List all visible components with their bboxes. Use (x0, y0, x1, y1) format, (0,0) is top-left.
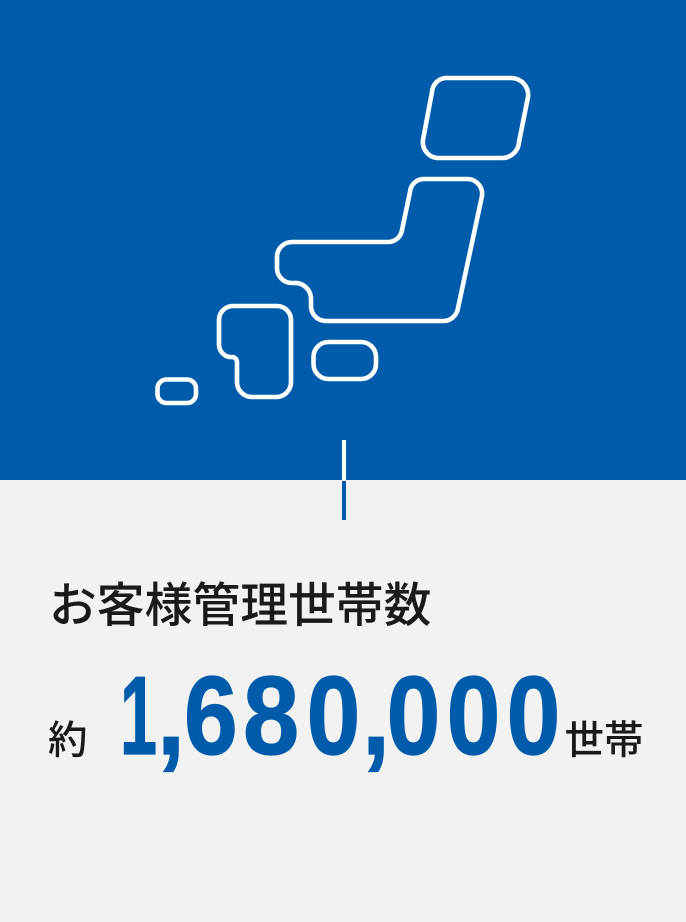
map of Japan (158, 78, 528, 403)
island: Shikoku (314, 342, 376, 379)
main number: , (157, 653, 185, 778)
main number: 0 (507, 655, 560, 779)
main number: 0 (387, 655, 440, 779)
main number: 1 (120, 655, 157, 778)
prefix label: 約 (48, 719, 88, 763)
connector line: blue part (342, 481, 346, 520)
main number: , (362, 653, 390, 778)
main number: 6 (184, 655, 238, 779)
statistic line (48, 653, 644, 779)
main number (120, 653, 560, 779)
main number: 0 (447, 655, 500, 779)
panel: blue map area (0, 0, 686, 480)
unit label: 世帯 (564, 719, 644, 763)
connector line: white part (342, 440, 346, 480)
main number: 8 (243, 655, 299, 778)
heading: お客様管理世帯数 (49, 580, 431, 633)
island: Honshu (277, 179, 482, 321)
island: Kyushu (219, 306, 291, 397)
main number: 0 (307, 655, 360, 779)
island: Okinawa (158, 380, 196, 403)
island: Hokkaido (423, 78, 528, 158)
